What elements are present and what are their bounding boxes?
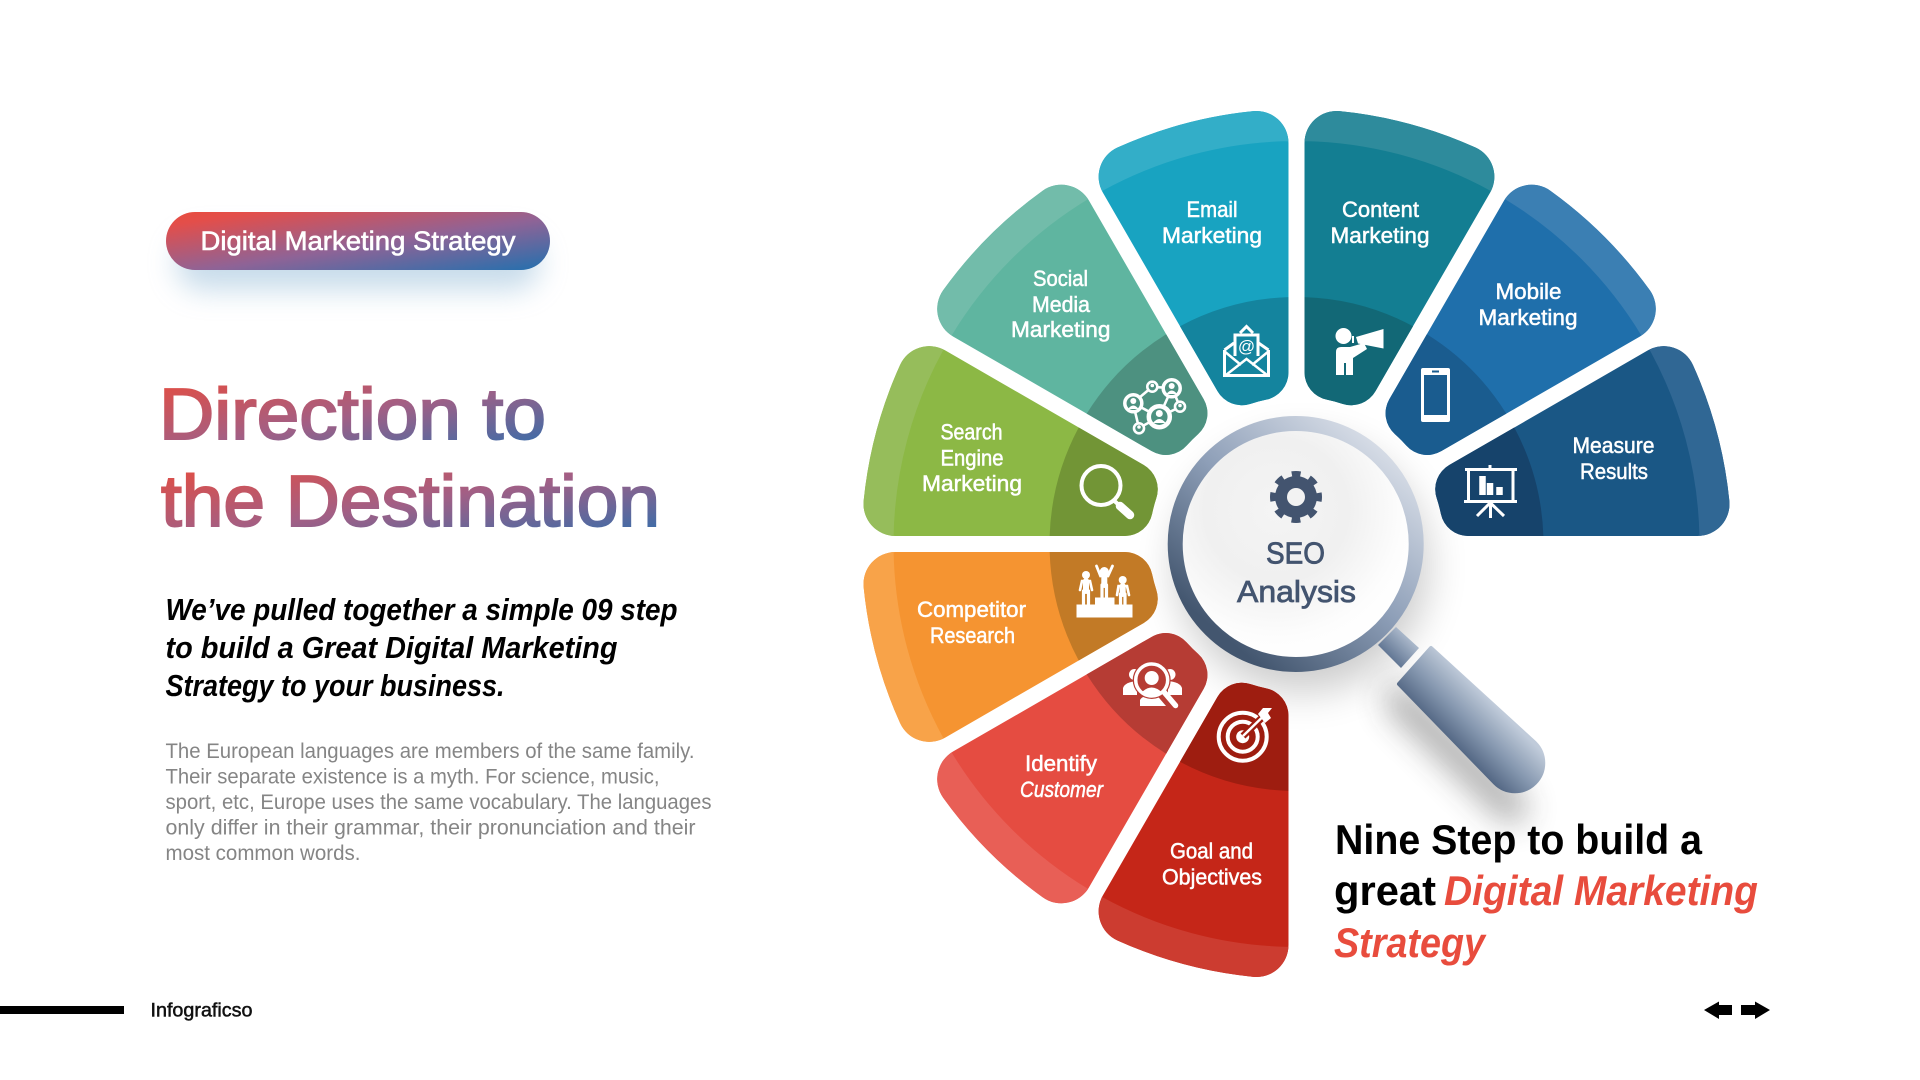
- segment: Social Media Marketing: Marketing: [1011, 317, 1110, 342]
- subheading: We’ve pulled together a simple 09 step: [166, 592, 678, 627]
- subheading: Strategy to your business.: [166, 668, 504, 703]
- category pill: Digital Marketing Strategy: Digital Marketing Strategy: [200, 226, 516, 256]
- footer brand: [0, 1000, 252, 1022]
- callout: Nine Step to build a great Digital Marketing Strategy: great: [1334, 867, 1436, 914]
- segment: Competitor Research: Research: [930, 623, 1015, 648]
- callout: Nine Step to build a great Digital Marketing Strategy: [1334, 816, 1758, 966]
- segment: Email Marketing: Marketing: [1162, 223, 1262, 248]
- segment: Goal and Objectives: [1090, 661, 1352, 989]
- segment: Competitor Research: Competitor: [917, 597, 1026, 622]
- title: Direction to the Destination: Direction to: [159, 375, 546, 455]
- handle: [1378, 627, 1543, 791]
- segment: Goal and Objectives: Objectives: [1162, 864, 1262, 890]
- segment: Measure Results: Measure: [1572, 433, 1654, 458]
- icon: winners podium: [1076, 566, 1132, 618]
- segment: Search Engine Marketing: Search: [940, 420, 1002, 444]
- icon: envelope: [1224, 326, 1269, 376]
- segment: Search Engine Marketing: Marketing: [922, 471, 1022, 496]
- segment: Mobile Marketing: Mobile: [1496, 279, 1562, 304]
- segment: Competitor Research: [851, 488, 1179, 750]
- center label: Analysis: [1237, 574, 1356, 609]
- navigation arrows: [1704, 1002, 1770, 1019]
- callout: Nine Step to build a great Digital Marketing Strategy: Strategy: [1334, 919, 1487, 966]
- center label: [1237, 536, 1356, 609]
- segment: Identify Customer: Customer: [1020, 777, 1104, 802]
- title: Direction to the Destination: the Destination: [161, 462, 660, 542]
- segment: Social Media Marketing: [920, 168, 1261, 509]
- segment: Social Media Marketing: Media: [1032, 292, 1091, 317]
- segment: Goal and Objectives: Goal and: [1170, 838, 1253, 864]
- icon: gear: [1274, 474, 1318, 520]
- body paragraph: [166, 740, 712, 865]
- segment: Social Media Marketing: Social: [1033, 266, 1088, 291]
- category pill: Digital Marketing Strategy: [166, 212, 550, 290]
- segment: Mobile Marketing: Marketing: [1478, 305, 1578, 330]
- icon: envelope: @: [1238, 337, 1255, 356]
- body paragraph: most common words.: [166, 842, 360, 865]
- footer brand: Infograficso: [150, 1000, 252, 1022]
- segment: Content Marketing: Marketing: [1330, 223, 1430, 248]
- magnifier cast shadow: [1176, 440, 1512, 808]
- icon: target with arrow: [1219, 708, 1272, 761]
- icon: magnifying glass: [1082, 466, 1130, 515]
- icon: customer search: [1123, 661, 1182, 706]
- segment: Mobile Marketing: [1332, 168, 1673, 509]
- callout: Nine Step to build a great Digital Marketing Strategy: Nine Step to build a: [1335, 816, 1703, 863]
- segment: Email Marketing: [1090, 99, 1352, 427]
- body paragraph: The European languages are members of the same family.: [166, 740, 694, 763]
- segment: Content Marketing: Content: [1342, 197, 1419, 222]
- callout: Nine Step to build a great Digital Marketing Strategy: Digital Marketing: [1444, 867, 1758, 914]
- icon: social network: [1125, 380, 1185, 433]
- segment: Identify Customer: Identify: [1025, 751, 1097, 776]
- body paragraph: only differ in their grammar, their pronunciation and their: [166, 816, 696, 840]
- segment: Measure Results: [1414, 338, 1742, 600]
- segment: Measure Results: Results: [1580, 459, 1648, 484]
- body paragraph: Their separate existence is a myth. For science, music,: [166, 766, 660, 788]
- segment: Search Engine Marketing: Engine: [940, 446, 1004, 470]
- segment: Identify Customer: [920, 579, 1261, 920]
- icon: person with megaphone: [1336, 328, 1384, 375]
- segment: Search Engine Marketing: [851, 338, 1179, 600]
- segment: Email Marketing: Email: [1186, 197, 1238, 222]
- title: Direction to the Destination: [159, 375, 660, 542]
- subheading: [166, 592, 678, 703]
- center label: SEO: [1266, 536, 1325, 570]
- icon: smartphone: [1421, 368, 1450, 422]
- lens: [1175, 424, 1416, 664]
- body paragraph: sport, etc, Europe uses the same vocabulary. The languages: [166, 791, 712, 814]
- magnifying glass: SEO Analysis: [1175, 424, 1543, 791]
- subheading: to build a Great Digital Marketing: [166, 630, 618, 665]
- segment: Content Marketing: [1241, 99, 1503, 427]
- icon: presentation board: [1464, 465, 1517, 518]
